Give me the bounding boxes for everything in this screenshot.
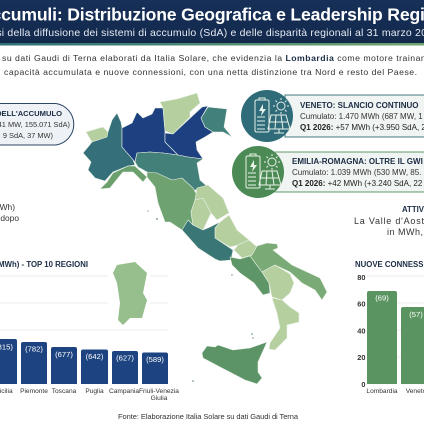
- intro text: capacità accumulata e nuove connessioni, con una netta distinzione tra Nord e resto del Paese.: [4, 67, 417, 77]
- region: Marche: [195, 185, 229, 220]
- bar labels: Piemonte: [20, 388, 48, 395]
- header banner: [0, 0, 424, 46]
- bar labels: [0, 388, 179, 402]
- text block: left note: dopo: [0, 213, 19, 223]
- region: Piemonte: [83, 113, 135, 181]
- region: Sicilia: [202, 342, 267, 384]
- y axis: 40: [357, 326, 366, 336]
- bars: [0, 339, 168, 384]
- region: Puglia: [250, 243, 327, 300]
- text block: attività: La Valle d'Aost: [354, 216, 424, 226]
- card: Emilia-Romagna: EMILIA-ROMAGNA: OLTRE IL GWI: [292, 157, 423, 166]
- bar labels: Toscana: [52, 388, 77, 395]
- bar values: (677): [55, 350, 73, 359]
- region: Veneto: [165, 106, 213, 159]
- region: Trentino-Alto Adige: [160, 93, 200, 134]
- region: Valle d'Aosta: [86, 127, 108, 142]
- bar values: [375, 294, 423, 319]
- intro text: [2, 53, 424, 77]
- y axis: [357, 273, 366, 389]
- callout: leader dell'accumulo: [0, 104, 74, 145]
- card: Veneto: VENETO: SLANCIO CONTINUO: [300, 101, 419, 110]
- callout: leader dell'accumulo: 9 SdA, 37 MW): [3, 131, 53, 140]
- bar labels: Lombardia: [366, 388, 398, 395]
- bar values: (589): [146, 355, 164, 364]
- region: Basilicata: [262, 265, 294, 300]
- text block: left note: Wh): [0, 202, 15, 212]
- card: Emilia-Romagna: [232, 146, 424, 198]
- bars: [367, 291, 424, 384]
- bar labels: Puglia: [85, 388, 104, 395]
- region: Molise: [234, 240, 257, 258]
- bar values: (642): [86, 352, 104, 361]
- region: Abruzzo: [215, 215, 249, 247]
- source note: Fonte: Elaborazione Italia Solare su dati Gaudi di Terna: [118, 412, 299, 421]
- text block: attività: in MWh,: [387, 227, 423, 237]
- bar values: (782): [25, 344, 43, 354]
- region: Sardegna: [113, 262, 147, 325]
- y axis: 0: [361, 380, 366, 389]
- region: Umbria: [191, 198, 211, 230]
- region: Calabria: [269, 298, 299, 350]
- icon: battery and solar panel (teal): [241, 90, 293, 142]
- region: Campania: [230, 256, 270, 295]
- card: Veneto: Cumulato: 1.470 MWh (687 MW, 1: [300, 112, 423, 121]
- bar chart: nuove connessioni: [355, 260, 424, 395]
- bar values: (69): [375, 294, 389, 302]
- region: Toscana: [147, 172, 197, 230]
- region: Emilia-Romagna: [135, 152, 208, 190]
- minor islands: [147, 210, 254, 382]
- region: Liguria: [100, 166, 147, 189]
- bar values: (57): [409, 310, 423, 319]
- bar values: (627): [116, 354, 134, 362]
- bar labels: Friuli-Venezia: [139, 388, 179, 395]
- text block: left note: [0, 202, 19, 223]
- y axis: 80: [357, 273, 366, 282]
- icon: battery and solar panel (green): [232, 146, 284, 198]
- intro text: su dati Gaudi di Terna elaborati da Italia Solare, che evidenzia la Lombardia come motore trainante: [2, 53, 424, 63]
- y axis: 60: [357, 300, 366, 308]
- bar chart: top 10 regioni: [0, 260, 179, 402]
- region: Lazio: [182, 220, 233, 261]
- map of Italy: [83, 93, 327, 384]
- region: Friuli-Venezia Giulia: [201, 107, 232, 137]
- bar values: [0, 342, 164, 364]
- bar labels: Campania: [109, 388, 139, 395]
- text block: attività: [354, 205, 424, 237]
- card: Emilia-Romagna: Q1 2026: +42 MWh (+3.240 SdA, 22 I: [292, 179, 424, 188]
- card: Emilia-Romagna: Cumulato: 1.039 MWh (530 MW, 85.: [292, 168, 421, 177]
- region: Lombardia: [122, 108, 178, 162]
- bar labels: Giulia: [151, 395, 168, 402]
- chart heading: NUOVE CONNESS: [355, 260, 423, 269]
- text block: attività: ATTIV: [402, 205, 424, 214]
- y axis: 20: [357, 353, 366, 362]
- card: Veneto: [241, 90, 424, 142]
- bar labels: [366, 388, 424, 395]
- card: Veneto: Q1 2026: +57 MWh (+3.950 SdA, 2: [300, 123, 424, 132]
